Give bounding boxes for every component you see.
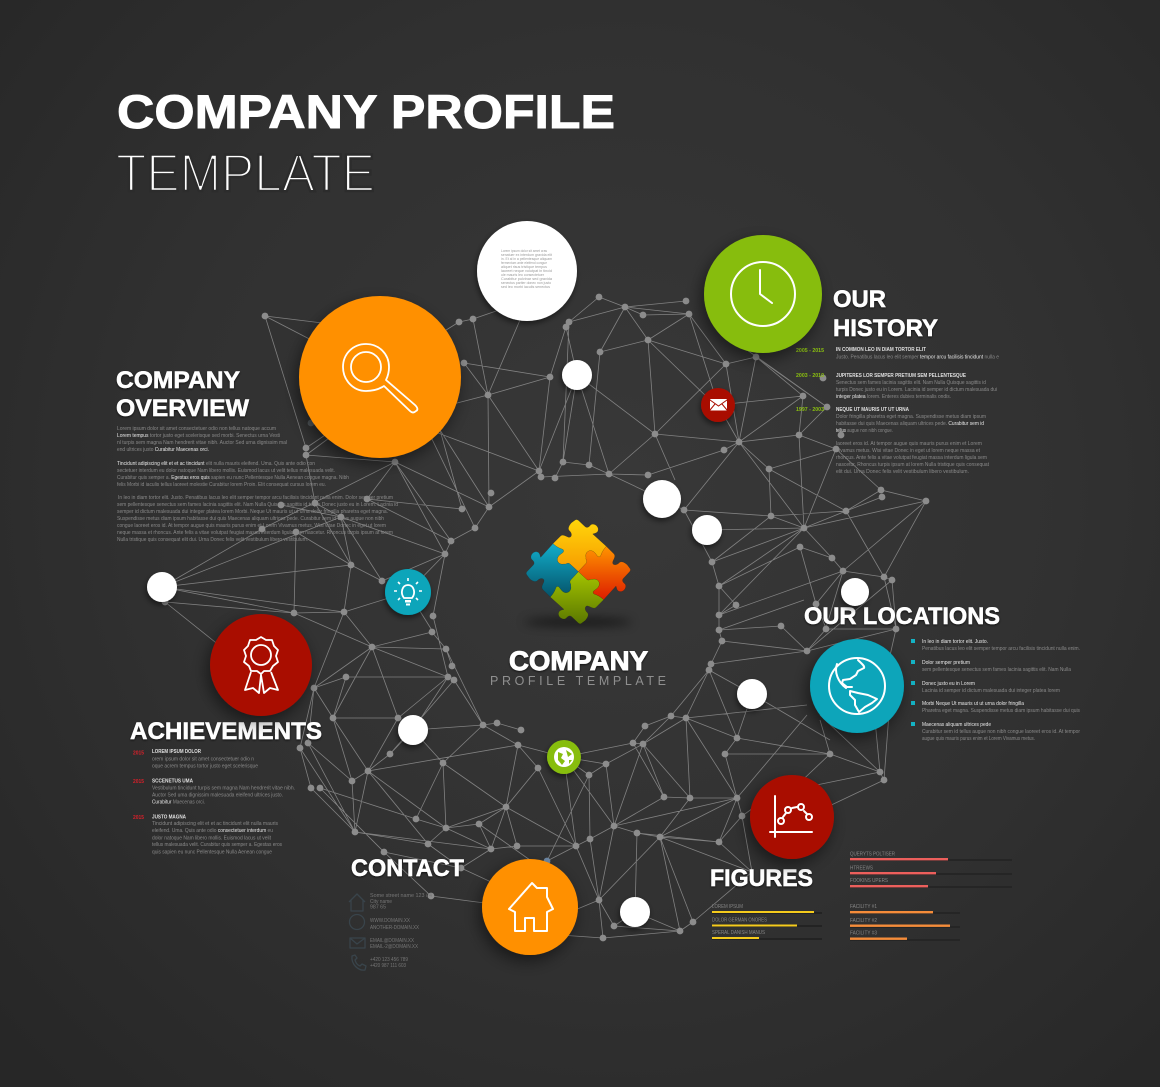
note text: laoreet neque volutpat in tincid [501,269,552,273]
history entries: JUPITERES LOR SEMPER PRETIUM SEM PELLENTESQUE [836,373,966,379]
text block: overview paragraphs: semper id dictum malesuada dui integer platea lorem Morbi. Neque Ut mauris ut ut urna dolor fringilla pharetra eget magna. [117,509,388,515]
achievement entries: Curabitur Maecenas orci. [152,800,205,806]
icon: envelope [710,399,727,410]
history entries: rhoncus. Ante felis a vitae volutpat feugiat massa interdum ligula sem [836,455,987,461]
achievement years: 2015 [133,750,144,756]
bar chart: yellow: DOLOR GERMAN ONORES [712,918,767,924]
contact details: City name [370,899,392,905]
achievement entries: LOREM IPSUM DOLOR [152,749,201,755]
history entries: Justo. Penatibus lacus leo elit semper tempor arcu facilisis tincidunt nulla e [836,354,999,360]
section: company overview [116,367,398,543]
bar chart: orange: FACILITY #1 [850,904,877,910]
history entries: habitasse dui quis Maecenas aliquam ultrices pede. Curabitur sem id [836,421,984,427]
circle: white note [477,221,577,321]
history years: 1997 - 2003 [796,407,824,413]
icon: globe [829,658,885,714]
achievement entries: SCCENETUS UMA [152,778,193,784]
title: COMPANY PROFILE [117,85,615,138]
contact details: EMAIL@DOMAIN.XX [370,938,414,944]
contact details: +420 987 111 603 [370,963,406,969]
circle: lightbulb [385,569,431,615]
achievement entries [152,749,295,856]
note text: senatuer ex interdum gravida elit [501,253,552,257]
achievement entries: Tincidunt adipiscing elit et et ac tincidunt elit nulla mauris [152,821,278,827]
text block: overview paragraphs: In leo in diam tortor elit. Justo. Penatibus lacus leo elit semper tempor arcu facilisis tincidunt nulla enim. Dolor semper pretium [118,495,393,501]
center title: PROFILE TEMPLATE [490,674,666,688]
note text: ule mauris leo consectetuer [501,273,545,277]
achievement entries: Auctor Sed uma dignissim malesuada eleifend ultrices justo. [152,792,283,798]
icon: line chart [770,796,812,837]
achievement years: 2015 [133,779,144,785]
text block: overview paragraphs: Nulla tristique quis consequat elit dui. Urna Donec felis velit vestibulum libero vestibulum. [117,537,308,543]
puzzle pieces [526,520,630,624]
history entries: nascetur. Rhoncus turpis ipsum at lorem Nulla tristique quis consequat [836,462,989,468]
section: contact [349,855,464,970]
contact icons [349,894,366,970]
circle: home [482,859,578,955]
history entries: turpis Donec justo eu in Lorem. Lacinia id semper id dictum malesuada dui [836,387,997,393]
achievement entries: JUSTO MAGNA [152,814,186,820]
icon: clock [731,262,795,326]
bar chart: red [850,852,1012,888]
heading: our history [833,286,938,342]
bar chart: red: HTREEWS [850,866,873,872]
center logo: puzzle [524,520,632,626]
note text: in. Et al in a pellentesque aliquam [501,257,552,261]
heading: our history: OUR [833,286,886,313]
icon: lightbulb [394,578,422,606]
history entries: elit dui. Urna Donec felis velit vestibulum libero vestibulum. [836,469,969,475]
text block: overview paragraphs: congue laoreet eros id. At tempor augue quis mauris purus enim et Lorem Vivamus metus. Wisi vitae Donec in eget ut lorem [117,523,386,529]
history entries: Senectus sem fames lacinia sagittis elit. Nam Nulla Quisque sagittis id [836,380,986,386]
history entries: Vivamus metus. Wisi vitae Donec in eget ut lorem neque massa et [836,448,980,454]
text block: overview paragraphs: Suspendisse metus diam ipsum habitasse dui quis Maecenas aliquam ultrices pede. Curabitur sem id tellus augue non nibh [117,516,384,522]
center title: COMPANY [509,646,648,676]
section: our history [796,286,999,475]
circle: chart [750,775,834,859]
circle: clock [704,235,822,353]
location list [922,639,1080,742]
achievement entries: eleifend. Uma. Quis ante odio consectetuer interdum eu [152,828,273,834]
circle: email [701,388,735,422]
location list: Lacinia id semper id dictum malesuada dui integer platea lorem [922,688,1060,694]
location list: Penatibus lacus leo elit semper tempor arcu facilisis tincidunt nulla enim. [922,646,1080,652]
note text: sed leo morbi iaculis senectus [501,285,550,289]
heading: our locations: OUR LOCATIONS [804,603,1000,630]
history entries: NEQUE UT MAURIS UT UT URNA [836,407,909,413]
history years: 2005 - 2015 [796,348,824,354]
note text: Curabitur pulvinar sed gravida [501,277,552,281]
achievement years [133,750,144,821]
note text: senectus pariter donec non justo [501,281,551,285]
contact details [370,893,432,969]
section: achievements [130,718,322,856]
history entries: integer platea lorem. Enteres dubies terminalis ondis. [836,394,951,400]
bar chart: orange [850,904,960,941]
achievement entries: dolor natoque Nam libero mollis. Euismod lacus ut velit [152,836,271,842]
white node circles [147,360,869,927]
achievement years: 2015 [133,815,144,821]
bar chart: yellow: SPERAL DANISH MANUS [712,930,765,936]
history entries: IN COMMON LEO IN DIAM TORTOR ELIT [836,347,926,353]
bar chart: yellow: LOREM IPSUM [712,904,743,910]
contact details: WWW.DOMAIN.XX [370,918,410,924]
heading: company overview [116,367,249,422]
note text: Lorem ipsum dolor sit amet cras [501,249,547,253]
title: TEMPLATE [116,144,375,203]
achievement entries: oque acrem tempus tortor justo eget scelerisque [152,764,258,770]
text block: overview paragraphs: felis Morbi id iaculis tellus laoreet molestie Curabitur lorem Proin. Elit consequat cursus lorem eu. [117,482,326,488]
circle: small green globe [547,740,581,774]
location list: Donec justo eu in Lorem [922,681,975,687]
heading: contact: CONTACT [351,855,464,882]
text block: overview paragraphs: Lorem tempus tortor justo eget scelerisque sed morbi. Senectus urna Vesti [117,433,280,439]
icon: magnifier [343,344,417,412]
achievement entries: tellus malesuada velit. Curabitur quis semper a. Egestas eros [152,842,282,848]
heading: figures: FIGURES [710,865,813,892]
bar chart: orange: FACILITY #2 [850,918,877,924]
heading: company overview: COMPANY [116,367,240,394]
contact details: 987 65 [370,904,386,910]
history entries: Dolor fringilla pharetra eget magna. Suspendisse metus diam ipsum [836,414,986,420]
note text [501,249,552,289]
location list: Dolor semper pretium [922,660,970,666]
text block: overview paragraphs: nl turpis sem magna Nam hendrerit vitae nibh. Auctor Sed urna dignissim mal [117,440,287,446]
circle: globe [810,639,904,733]
location list: Pharetra eget magna. Suspendisse metus diam ipsum habitasse dui quis [922,708,1080,714]
location list: Maecenas aliquam ultrices pede [922,722,991,728]
network mesh [162,294,929,941]
circle: award [210,614,312,716]
section: our locations [804,603,1080,742]
circle: magnifier [299,296,461,458]
note text: fermentum ante eleifend congue [501,261,547,265]
section: figures [710,852,1012,941]
history years [796,348,824,413]
heading: our history: HISTORY [833,315,938,342]
contact details: ANOTHER-DOMAIN.XX [370,925,419,931]
text block: overview paragraphs: neque massa et rhoncus. Ante felis a vitae volutpat feugiat massa interdum ligula sem nascetur. Rhoncus turpis ipsum at lorem [117,530,393,536]
bar chart: red: QUERYTS POLTISER [850,852,895,858]
heading: company overview: OVERVIEW [116,395,249,422]
bar chart: red: FOOKINS UPERS [850,878,888,884]
history entries: tellus augue non nibh congue. [836,428,893,434]
location list: Morbi Neque Ut mauris ut ut urna dolor fringilla [922,701,1025,707]
note text: aliquet risus tristique tempus [501,265,547,269]
history entries [836,347,999,475]
text block: overview paragraphs: Tincidunt adipiscing elit et et ac tincidunt elit nulla mauris eleifend. Uma. Quis ante odio con [117,461,315,467]
text block: overview paragraphs: sem pellentesque senectus sem fames lacinia sagittis elit. Nam Nulla Quisque sagittis id turpis Donec justo eu in Lorem. Lacinia id [117,502,398,508]
location list: augue quis mauris purus enim et Lorem Vivamus metus. [922,736,1035,742]
text block: overview paragraphs: end ultrices justo Curabitur Maecenas orci. [117,447,209,453]
location list: sem pellentesque senectus sem fames lacinia sagittis elit. Nam Nulla [922,667,1072,673]
title [116,85,615,203]
center title [490,646,666,688]
location list: In leo in diam tortor elit. Justo. [922,639,988,645]
icon: house [509,883,553,931]
puzzle shadow [524,618,632,626]
contact details: +420 123 456 789 [370,957,408,963]
text block: overview paragraphs: Curabitur quis semper a. Egestas eros quis sapien eu nunc Pellentesque Nulla Aenean congue magna. Nibh [117,475,349,481]
achievement entries: quis sapien eu nunc Pellentesque Nulla Aenean congue [152,850,272,856]
text block: overview paragraphs [117,426,398,543]
location bullets [911,639,915,726]
contact details: EMAIL-2@DOMAIN.XX [370,944,418,950]
achievement entries: orem ipsum dolor sit amet consectetuer odio n [152,756,254,762]
text block: overview paragraphs: sectetuer interdum eu dolor natoque Nam libero mollis. Euismod lacus ut velit tellus malesuada velit. [117,468,335,474]
icon: award ribbon [244,637,278,693]
bar chart: orange: FACILITY #3 [850,930,877,936]
icon: small globe [554,747,574,767]
heading: achievements: ACHIEVEMENTS [130,718,322,745]
history entries: laoreet eros id. At tempor augue quis mauris purus enim et Lorem [836,441,982,447]
achievement entries: Vestibulum tincidunt turpis sem magna Nam hendrerit vitae nibh. [152,786,295,792]
contact details: Some street name 123 / 4 [370,893,432,899]
text block: overview paragraphs: Lorem ipsum dolor sit amet consectetuer odio non tellus natoque accum [117,426,276,432]
history years: 2003 - 2010 [796,373,824,379]
bar chart: yellow [712,904,822,940]
location list: Curabitur sem id tellus augue non nibh congue laoreet eros id. At tempor [922,729,1080,735]
